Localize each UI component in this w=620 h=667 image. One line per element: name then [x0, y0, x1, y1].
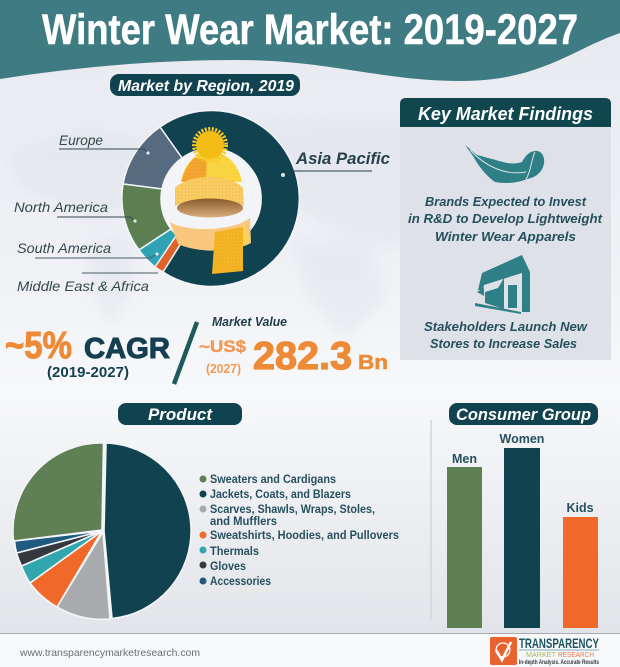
stat: market value: Bn	[358, 352, 388, 374]
stat: CAGR: ~5%	[5, 325, 72, 367]
bar: men: Men	[452, 452, 477, 466]
bar: women: Women	[500, 432, 544, 446]
slice: accessories	[14, 531, 102, 553]
heading pill: market by region: Market by Region, 2019	[118, 78, 294, 95]
icon: store	[475, 255, 530, 314]
legend item: scarves: Scarves, Shawls, Wraps, Stoles,	[210, 502, 375, 516]
legend item: scarves	[200, 502, 375, 528]
segment: Asia Pacific	[160, 110, 299, 286]
logo: transparency market research: RESEARCH	[558, 652, 594, 659]
logo: transparency market research: MARKET	[526, 652, 557, 659]
panel heading: Key Market Findings	[418, 104, 593, 124]
bar: kids: Kids	[566, 501, 594, 515]
slice: scarves and shawls	[57, 532, 110, 619]
heading pill: consumer group: Consumer Group	[456, 405, 591, 424]
stat: CAGR	[5, 325, 170, 381]
legend item: sweatshirts: Sweatshirts, Hoodies, and Pullovers	[210, 528, 399, 542]
label: Europe: Europe	[59, 132, 103, 148]
donut chart: market by region	[122, 110, 299, 286]
scarf collar	[170, 218, 251, 251]
legend item: jackets: Jackets, Coats, and Blazers	[210, 487, 351, 501]
finding: lightweight apparels: in R&D to Develop Lightweight	[408, 211, 603, 226]
finding: lightweight apparels: Brands Expected to Invest	[425, 194, 587, 209]
hat dome	[181, 152, 242, 182]
website url: www.transparencymarketresearch.com	[19, 647, 200, 659]
divider: vertical	[430, 420, 432, 620]
logo: transparency market research	[490, 635, 600, 666]
segment: Europe	[123, 127, 182, 189]
bar: men	[447, 452, 482, 628]
panel header	[400, 98, 611, 127]
segment: North America	[122, 184, 171, 250]
stat: market value: (2027)	[206, 362, 241, 376]
segment: South America	[139, 229, 179, 267]
finding: lightweight apparels: Winter Wear Apparels	[435, 229, 576, 244]
finding: new stores: Stakeholders Launch New	[424, 319, 588, 334]
pie chart: product	[13, 443, 191, 619]
header banner	[0, 0, 620, 81]
footer	[0, 633, 620, 667]
stat: CAGR: (2019-2027)	[47, 365, 129, 381]
heading pill: product: Product	[148, 405, 213, 424]
heading pill: product	[118, 403, 242, 425]
logo: transparency market research: In-depth Analysis. Accurate Results	[519, 660, 600, 666]
pom-pom	[194, 129, 226, 161]
logo mark	[490, 637, 517, 665]
icon: feather	[465, 145, 544, 183]
legend item: sweaters: Sweaters and Cardigans	[210, 472, 336, 486]
slice: sweaters and cardigans	[13, 443, 104, 541]
panel: key market findings	[400, 98, 611, 360]
bar chart: consumer group	[447, 432, 598, 628]
faint world map	[5, 115, 600, 340]
stat: market value: 282.3	[253, 335, 352, 378]
legend item: scarves: and Mufflers	[210, 514, 277, 528]
stat: market value: Market Value	[212, 314, 287, 329]
slice: gloves	[16, 531, 102, 566]
finding: new stores: Stores to Increase Sales	[430, 336, 577, 351]
legend item: thermals: Thermals	[210, 544, 259, 558]
divider slash	[174, 322, 197, 384]
stat: CAGR: CAGR	[84, 333, 170, 365]
legend item: accessories: Accessories	[210, 574, 271, 588]
stat: market value	[199, 314, 388, 378]
stat: market value: ~US$	[199, 337, 247, 356]
label: Europe	[59, 132, 150, 155]
finding: new stores	[424, 319, 588, 351]
scarf tail	[212, 222, 250, 274]
hat brim	[175, 177, 244, 206]
legend: product	[200, 472, 399, 588]
bar: kids	[563, 501, 598, 628]
slice: sweatshirts and hoodies	[30, 531, 102, 607]
label: South America: South America	[17, 240, 111, 256]
label: North America	[14, 199, 137, 223]
label: Asia Pacific: Asia Pacific	[295, 149, 391, 168]
label: Asia Pacific	[281, 149, 391, 177]
label: Middle East and Africa: Middle East & Africa	[17, 278, 149, 294]
bar: women	[500, 432, 544, 628]
icon: knitted hat and scarf	[162, 129, 260, 274]
slice: jackets, coats, and blazers	[104, 443, 191, 618]
label: North America: North America	[14, 199, 108, 215]
hat opening	[177, 198, 243, 218]
label: South America	[17, 240, 159, 258]
slice: thermals	[22, 531, 102, 583]
finding: lightweight apparels	[408, 194, 603, 244]
segment: Middle East and Africa	[155, 236, 183, 272]
legend item: gloves: Gloves	[210, 559, 246, 573]
